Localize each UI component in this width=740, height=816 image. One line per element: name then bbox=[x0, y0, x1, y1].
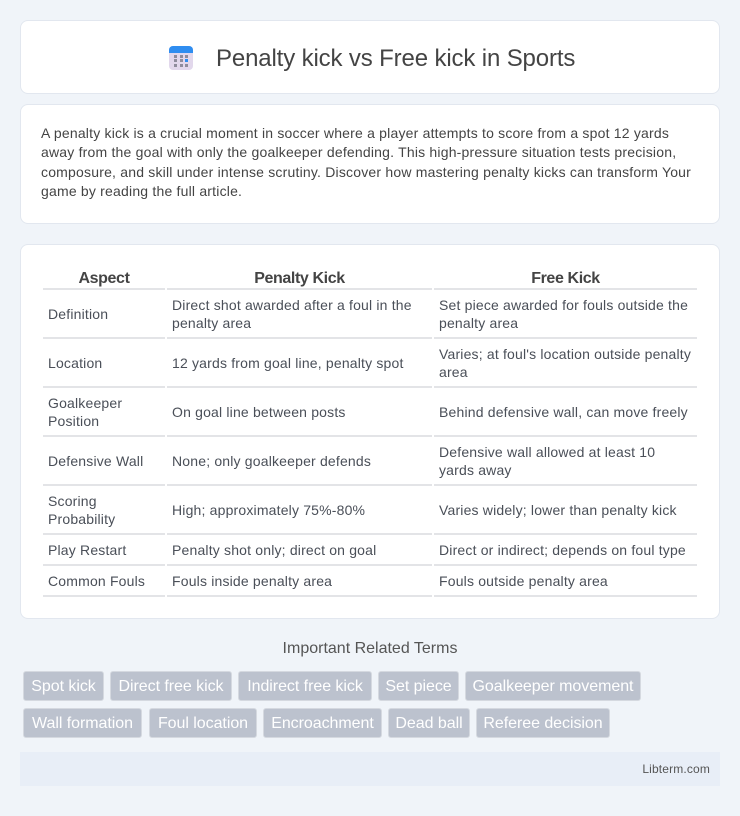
intro text: composure, and skill under intense scrutiny. Discover how mastering penalty kicks can transform Your bbox=[41, 164, 691, 180]
row: Scoring Probability: Probability bbox=[48, 511, 115, 527]
row: Play Restart: Play Restart bbox=[48, 542, 126, 558]
tags: related terms: Foul location bbox=[158, 715, 248, 732]
intro text bbox=[41, 125, 691, 199]
row: Location: Location bbox=[48, 355, 102, 371]
panel: comparison table bbox=[20, 244, 720, 619]
row: Scoring Probability: Varies widely; lower than penalty kick bbox=[439, 502, 677, 518]
row: Goalkeeper Position: Goalkeeper bbox=[48, 395, 122, 411]
tags: related terms: Dead ball bbox=[395, 715, 463, 732]
table header: Aspect bbox=[78, 270, 130, 287]
intro text: away from the goal with only the goalkeeper defending. This high-pressure situation tests precision, bbox=[41, 144, 676, 160]
row: Play Restart: Direct or indirect; depends on foul type bbox=[439, 542, 686, 558]
table header: Free Kick bbox=[531, 270, 600, 287]
tags: related terms: Spot kick bbox=[31, 678, 96, 695]
intro text: A penalty kick is a crucial moment in soccer where a player attempts to score from a spot 12 yards bbox=[41, 125, 669, 141]
row: Location bbox=[48, 346, 691, 380]
tags: related terms: Direct free kick bbox=[118, 678, 224, 695]
row: Location: area bbox=[439, 364, 468, 380]
tags: related terms: Wall formation bbox=[32, 715, 133, 732]
panel: header bbox=[20, 20, 720, 94]
table header bbox=[78, 270, 600, 287]
row: Definition: penalty area bbox=[439, 315, 518, 331]
row: Goalkeeper Position: On goal line between posts bbox=[172, 404, 346, 420]
row: Common Fouls: Fouls inside penalty area bbox=[172, 573, 332, 589]
row: Goalkeeper Position bbox=[48, 395, 688, 429]
title: Penalty kick vs Free kick in Sports bbox=[216, 45, 575, 72]
row: Scoring Probability bbox=[48, 493, 677, 527]
row: Play Restart: Penalty shot only; direct on goal bbox=[172, 542, 376, 558]
table header: Penalty Kick bbox=[254, 270, 345, 287]
tags: related terms: Encroachment bbox=[271, 715, 374, 732]
row: Location: Varies; at foul's location outside penalty bbox=[439, 346, 691, 362]
row: Defensive Wall: Defensive wall allowed at least 10 bbox=[439, 444, 655, 460]
row: Definition bbox=[48, 297, 688, 331]
table grid lines bbox=[43, 288, 697, 597]
footer credit: Libterm.com bbox=[642, 762, 710, 776]
row: Scoring Probability: Scoring bbox=[48, 493, 97, 509]
row: Defensive Wall: yards away bbox=[439, 462, 512, 478]
row: Defensive Wall: Defensive Wall bbox=[48, 453, 143, 469]
tags: related terms: Referee decision bbox=[483, 715, 603, 732]
tags: related terms: Goalkeeper movement bbox=[473, 678, 633, 695]
row: Goalkeeper Position: Position bbox=[48, 413, 99, 429]
heading: related terms: Important Related Terms bbox=[283, 640, 457, 657]
tags: related terms: Set piece bbox=[385, 678, 452, 695]
row: Defensive Wall: None; only goalkeeper defends bbox=[172, 453, 371, 469]
icon: calendar bbox=[169, 46, 193, 70]
row: Definition: Direct shot awarded after a foul in the bbox=[172, 297, 412, 313]
tags: related terms bbox=[23, 671, 641, 738]
row: Play Restart bbox=[48, 542, 686, 558]
intro text: game by reading the full article. bbox=[41, 183, 242, 199]
tags: related terms: Indirect free kick bbox=[247, 678, 363, 695]
row: Common Fouls: Fouls outside penalty area bbox=[439, 573, 608, 589]
row: Location: 12 yards from goal line, penalty spot bbox=[172, 355, 404, 371]
row: Definition: penalty area bbox=[172, 315, 251, 331]
row: Goalkeeper Position: Behind defensive wall, can move freely bbox=[439, 404, 688, 420]
row: Definition: Definition bbox=[48, 306, 108, 322]
row: Common Fouls bbox=[48, 573, 608, 589]
row: Definition: Set piece awarded for fouls outside the bbox=[439, 297, 688, 313]
row: Scoring Probability: High; approximately 75%-80% bbox=[172, 502, 365, 518]
row: Common Fouls: Common Fouls bbox=[48, 573, 145, 589]
footer bbox=[20, 752, 720, 786]
panel: introduction bbox=[20, 104, 720, 224]
row: Defensive Wall bbox=[48, 444, 655, 478]
